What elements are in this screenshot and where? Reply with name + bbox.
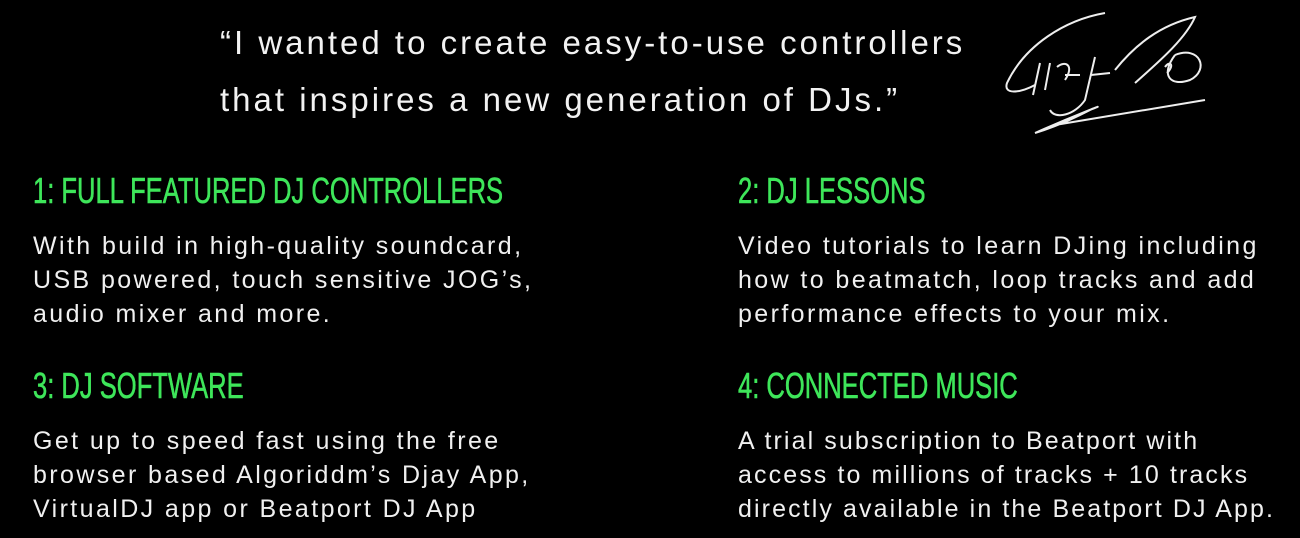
quote: that inspires a new generation of DJs.” bbox=[220, 81, 900, 118]
text 2: performance effects to your mix. bbox=[738, 300, 1171, 328]
text 3: VirtualDJ app or Beatport DJ App bbox=[33, 495, 478, 523]
section 2 bbox=[738, 170, 1259, 328]
text 2 bbox=[738, 232, 1259, 328]
text 2: Video tutorials to learn DJing including bbox=[738, 232, 1259, 260]
section 3 bbox=[33, 365, 531, 523]
text 3 bbox=[33, 427, 531, 523]
text 1: With build in high-quality soundcard, bbox=[33, 232, 523, 260]
quote: “I wanted to create easy-to-use controllers bbox=[220, 24, 965, 61]
text 2: how to beatmatch, loop tracks and add bbox=[738, 266, 1256, 294]
text 4 bbox=[738, 427, 1275, 523]
signature bbox=[1005, 12, 1206, 134]
text 1: audio mixer and more. bbox=[33, 300, 332, 328]
text 4: access to millions of tracks + 10 tracks bbox=[738, 461, 1249, 489]
section 1 bbox=[33, 170, 533, 328]
text 4: directly available in the Beatport DJ App. bbox=[738, 495, 1275, 523]
heading 4: 4: CONNECTED MUSIC bbox=[738, 365, 1018, 406]
section 4 bbox=[738, 365, 1275, 523]
text 3: browser based Algoriddm’s Djay App, bbox=[33, 461, 531, 489]
heading 2: 2: DJ LESSONS bbox=[738, 170, 926, 211]
heading 1: 1: FULL FEATURED DJ CONTROLLERS bbox=[33, 170, 503, 211]
text 1: USB powered, touch sensitive JOG’s, bbox=[33, 266, 533, 294]
quote bbox=[220, 24, 965, 118]
text 4: A trial subscription to Beatport with bbox=[738, 427, 1199, 455]
heading 3: 3: DJ SOFTWARE bbox=[33, 365, 244, 406]
text 3: Get up to speed fast using the free bbox=[33, 427, 501, 455]
text 1 bbox=[33, 232, 533, 328]
